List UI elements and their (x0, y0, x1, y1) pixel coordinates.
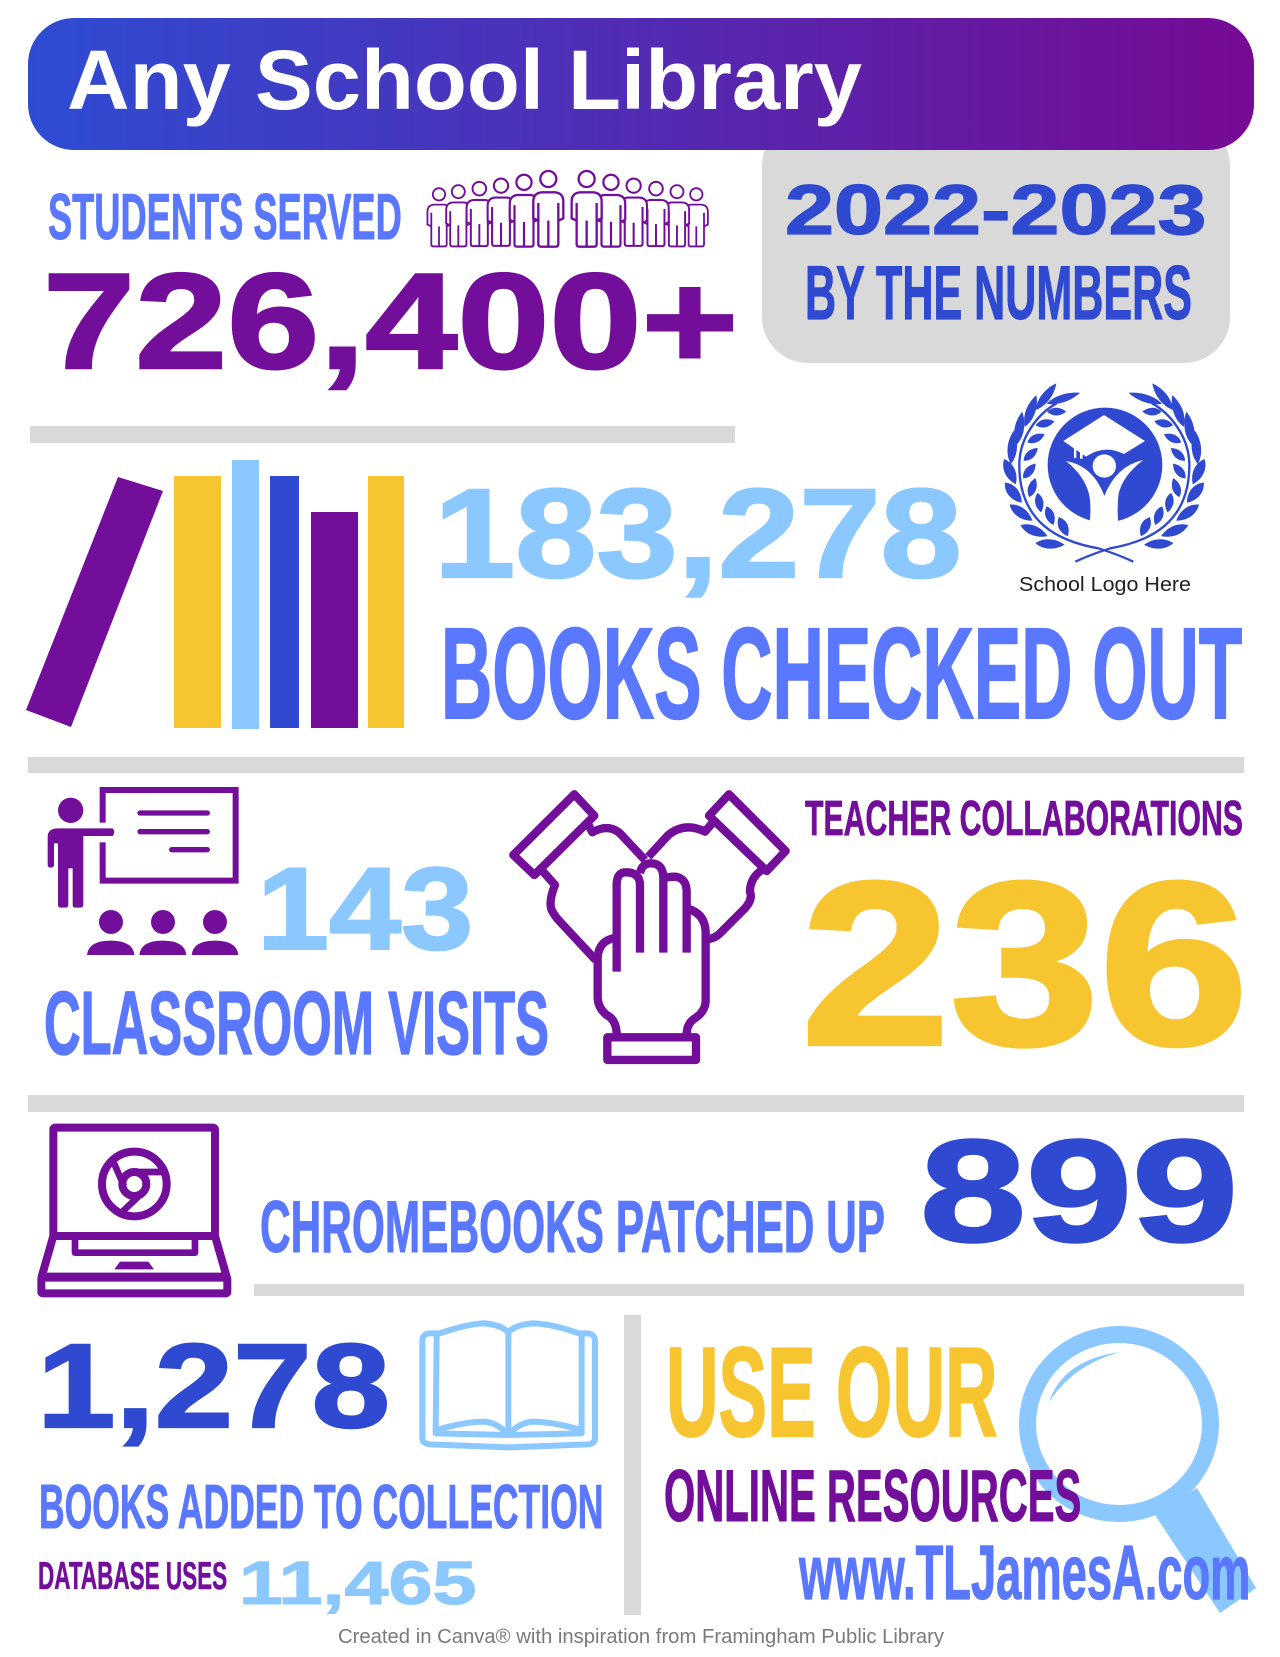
books added label: BOOKS ADDED TO COLLECTION (39, 1471, 603, 1542)
chromebooks patched up label: CHROMEBOOKS PATCHED UP (260, 1186, 885, 1268)
students served number: 726,400+ (43, 246, 738, 398)
icon: group of people (427, 171, 708, 247)
books added number: 1,278 (37, 1319, 390, 1453)
website url: www.TLJamesA.com (798, 1531, 1250, 1616)
icon: magnifying glass (1028, 1334, 1256, 1613)
books checked out label: BOOKS CHECKED OUT (441, 601, 1242, 747)
footer credit: Created in Canva® with inspiration from Framingham Public Library (338, 1626, 944, 1648)
database uses number: 11,465 (239, 1549, 476, 1617)
teacher collaborations number: 236 (801, 835, 1248, 1094)
by the numbers label: BY THE NUMBERS (805, 251, 1192, 336)
logo caption: School Logo Here (1019, 574, 1191, 596)
icon: stacked hands (513, 794, 786, 1060)
year heading: 2022-2023 (785, 170, 1207, 249)
books checked out number: 183,278 (434, 462, 962, 604)
title: Any School Library (67, 33, 862, 128)
icon: chromebook laptop (41, 1128, 227, 1293)
classroom visits number: 143 (257, 844, 473, 975)
classroom visits label: CLASSROOM VISITS (44, 974, 549, 1074)
database uses label: DATABASE USES (38, 1554, 227, 1598)
students served label: STUDENTS SERVED (48, 181, 402, 254)
use our heading: USE OUR (666, 1321, 998, 1463)
icon: row of books (26, 460, 404, 729)
icon: teacher presenting to class (48, 790, 238, 955)
school logo (999, 381, 1209, 596)
icon: open book (422, 1323, 595, 1447)
icon: laurel wreath crest (999, 381, 1209, 562)
online resources heading: ONLINE RESOURCES (664, 1457, 1081, 1537)
panel: 2022-2023 by the numbers (762, 120, 1230, 363)
chromebooks number: 899 (920, 1110, 1238, 1272)
title banner (28, 18, 1254, 150)
teacher collaborations label: TEACHER COLLABORATIONS (805, 790, 1243, 846)
